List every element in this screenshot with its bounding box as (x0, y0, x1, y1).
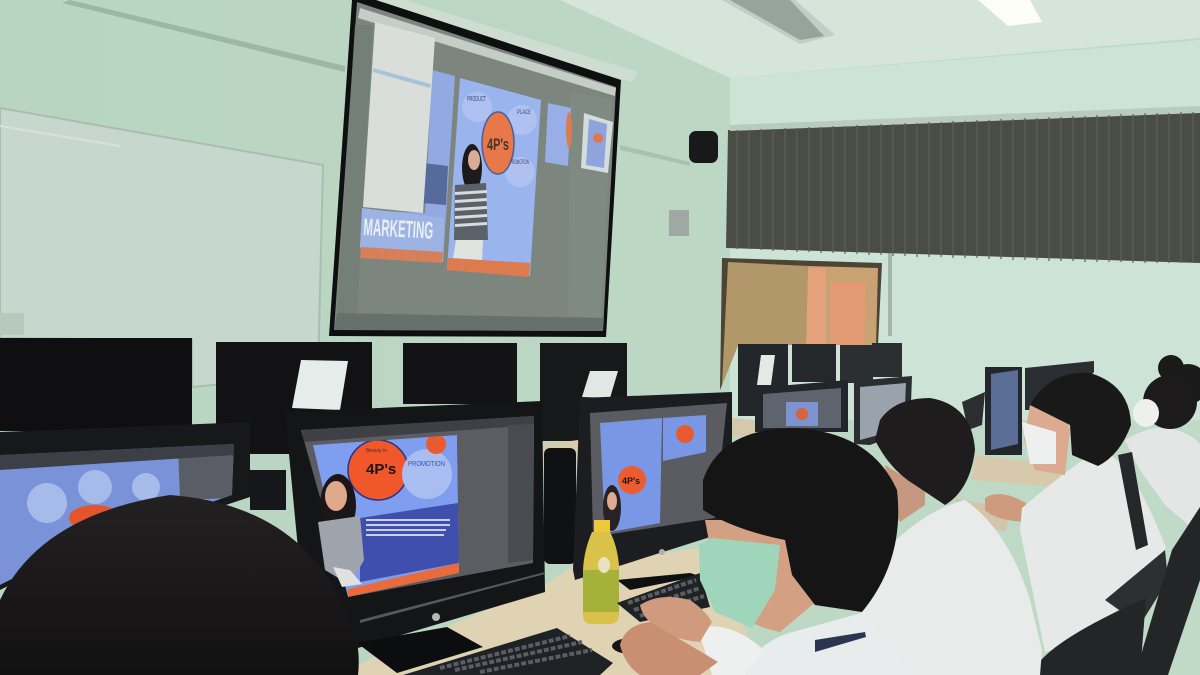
speaker (689, 131, 718, 163)
door (720, 258, 882, 390)
projector screen (329, 0, 638, 337)
chairs (1032, 507, 1200, 675)
woman on monitor (318, 474, 364, 587)
front monitor right: 4P's (622, 476, 640, 486)
document main on screen: PLACE (517, 110, 531, 116)
front monitor center: 4P's (366, 461, 396, 478)
front monitor center (285, 401, 545, 673)
front desk (350, 548, 770, 675)
student center (858, 398, 1042, 675)
student front (620, 428, 912, 675)
document left on screen (360, 70, 455, 263)
keyboard center (403, 628, 613, 675)
document left on screen: MARKETING (363, 214, 434, 245)
document main on screen: PRODUCT (467, 96, 486, 103)
back row monitors right (738, 343, 1094, 455)
front monitor left (0, 422, 250, 590)
vertical blinds (726, 106, 1200, 263)
ceiling lights (722, 0, 1042, 44)
thumbnail one (545, 103, 572, 166)
wall box (669, 210, 689, 236)
document main on screen (447, 78, 541, 277)
thumbnail two (581, 113, 613, 173)
document main on screen: PROMOTION (510, 160, 529, 166)
front monitor center: Beauty in (366, 448, 387, 454)
whiteboard (0, 108, 323, 387)
file menu (363, 22, 435, 213)
front monitor center: PROMOTION (408, 459, 445, 468)
back row monitors left (0, 338, 627, 564)
student right (985, 373, 1166, 652)
keyboard right (617, 573, 710, 622)
rear right desk (732, 392, 1060, 532)
bottle (583, 520, 619, 624)
mouse (612, 638, 650, 654)
head foreground (0, 495, 359, 675)
document main on screen: 4P's (487, 135, 509, 154)
woman on screen (453, 144, 488, 260)
rear right students (1125, 355, 1200, 535)
front monitor right (573, 392, 732, 590)
